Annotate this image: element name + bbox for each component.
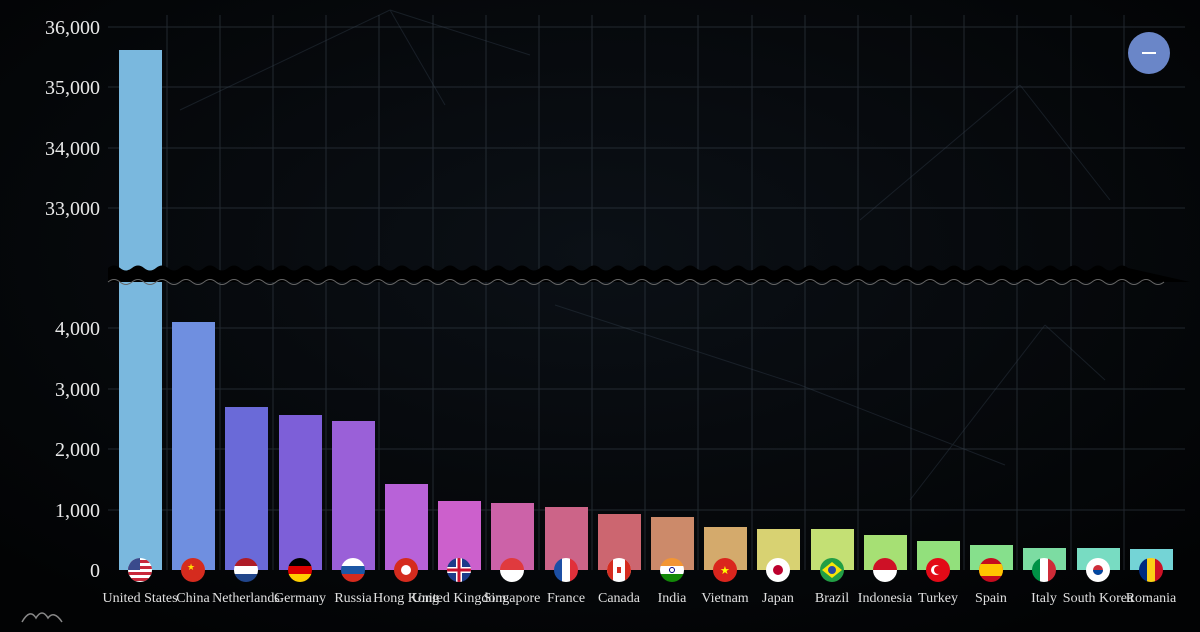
- x axis labels: [102, 591, 1177, 606]
- x axis labels: United Kingdom: [412, 591, 506, 606]
- y axis labels: 36,000: [45, 17, 100, 39]
- x axis labels: Vietnam: [701, 591, 749, 606]
- x axis labels: Singapore: [484, 591, 540, 606]
- y axis labels: 3,000: [55, 379, 100, 401]
- y axis labels: 33,000: [45, 198, 100, 220]
- x axis labels: Germany: [274, 591, 326, 606]
- x axis labels: Italy: [1031, 591, 1057, 606]
- x axis labels: Hong Kong: [373, 591, 439, 606]
- x axis labels: Russia: [334, 591, 372, 606]
- y axis labels: [45, 17, 100, 582]
- y axis labels: 2,000: [55, 439, 100, 461]
- x axis labels: Spain: [975, 591, 1007, 606]
- y axis labels: 35,000: [45, 77, 100, 99]
- flags: ★: [187, 562, 195, 572]
- x axis labels: Japan: [762, 591, 794, 606]
- y axis labels: 34,000: [45, 138, 100, 160]
- y axis labels: 0: [90, 560, 100, 582]
- x axis labels: China: [176, 591, 211, 606]
- x axis labels: India: [658, 591, 687, 606]
- x axis labels: France: [547, 591, 585, 606]
- x axis labels: Canada: [598, 591, 641, 606]
- x axis labels: Turkey: [918, 591, 958, 606]
- axis break: [108, 266, 1190, 284]
- y axis labels: 1,000: [55, 500, 100, 522]
- x axis labels: Indonesia: [858, 591, 913, 606]
- x axis labels: Brazil: [815, 591, 849, 606]
- flags: [128, 558, 1163, 582]
- y axis labels: 4,000: [55, 318, 100, 340]
- x axis labels: Netherlands: [212, 591, 280, 606]
- logo: [22, 613, 62, 622]
- bar chart: [119, 50, 1173, 570]
- zoom out button: [1128, 32, 1170, 74]
- x axis labels: Romania: [1126, 591, 1177, 606]
- grid: [108, 15, 1185, 570]
- x axis labels: South Korea: [1063, 591, 1134, 606]
- flags: ★: [720, 565, 730, 577]
- x axis labels: United States: [102, 591, 178, 606]
